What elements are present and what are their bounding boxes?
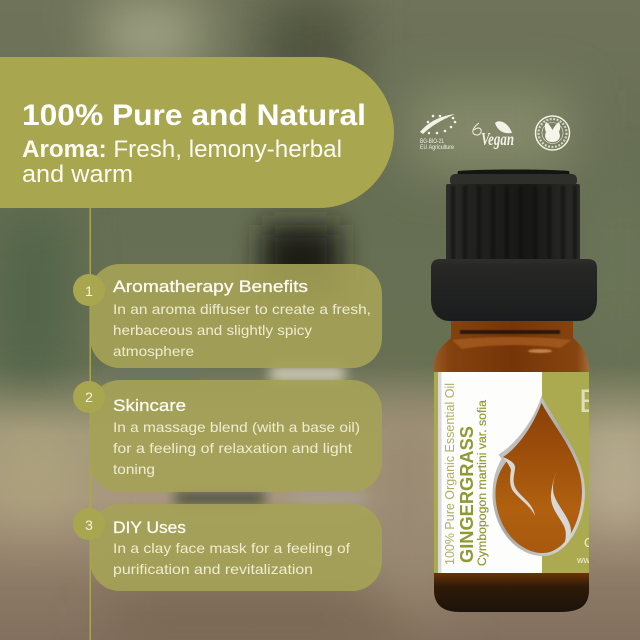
card 3: DIY Uses — [73, 504, 382, 591]
heading: 100% Pure and Natural: 100% Pure and Natural — [22, 99, 366, 132]
label text: Cymbopogon martini var. sofia: Cymbopogon martini var. sofia — [477, 399, 489, 566]
card 3 body: purification and revitalization — [113, 562, 313, 577]
number badge 1: 1 — [85, 283, 93, 299]
aroma description — [22, 136, 342, 188]
number badge 2 — [73, 381, 105, 413]
icon: Vegan logo: Vegan — [481, 129, 514, 149]
dropper cap — [431, 170, 597, 321]
number badge 2: 2 — [85, 389, 93, 405]
icon: Vegan logo — [473, 121, 514, 149]
card 1 title: Aromatherapy Benefits — [113, 277, 308, 296]
bottle glass — [434, 321, 600, 612]
icon: EU organic certification — [420, 114, 456, 151]
icon: EU organic certification: EU Agriculture — [420, 144, 454, 151]
product bottle — [431, 170, 600, 612]
header panel — [0, 57, 394, 208]
label: brand letters: E — [579, 383, 600, 419]
label: left olive strip — [434, 372, 438, 573]
card 2 body: for a feeling of relaxation and light — [113, 441, 352, 456]
number badge 3 — [73, 508, 105, 540]
cap ribs — [451, 186, 577, 260]
card 2 body: toning — [113, 462, 155, 477]
number badge 3: 3 — [85, 517, 93, 533]
card 1 body: herbaceous and slightly spicy — [113, 323, 312, 338]
drop emblem — [492, 396, 585, 556]
number badge 1 — [73, 274, 105, 306]
card 1 body: In an aroma diffuser to create a fresh, — [113, 302, 371, 317]
card 2 title: Skincare — [113, 396, 186, 415]
vertical timeline line — [90, 200, 91, 640]
card 3 title: DIY Uses — [113, 518, 186, 537]
label text: GINGERGRASS: GINGERGRASS — [457, 426, 477, 563]
card 2: Skincare — [73, 380, 382, 492]
label: brand letters: www — [576, 555, 597, 565]
label text: 100% Pure Organic Essential Oil: 100% Pure Organic Essential Oil — [443, 383, 457, 565]
card 3 body: In a clay face mask for a feeling of — [113, 541, 350, 556]
card 1: Aromatherapy Benefits — [73, 264, 382, 368]
icon: EU organic certification: BG-BIO-21 — [420, 138, 444, 145]
label: white panel — [434, 372, 542, 573]
card 1 body: atmosphere — [113, 344, 194, 359]
card 1 body — [113, 302, 371, 359]
flame highlights — [503, 457, 535, 516]
icon: no animal testing — [536, 116, 570, 150]
card 3 body — [113, 541, 350, 577]
aroma description: and warm — [22, 161, 133, 188]
card 2 body: In a massage blend (with a base oil) — [113, 420, 360, 435]
label: brand letters: C — [584, 535, 593, 550]
label: brand letters — [577, 390, 589, 563]
card 2 body — [113, 420, 360, 477]
label: olive panel — [542, 372, 589, 573]
aroma description: Aroma: Fresh, lemony-herbal — [22, 136, 342, 163]
